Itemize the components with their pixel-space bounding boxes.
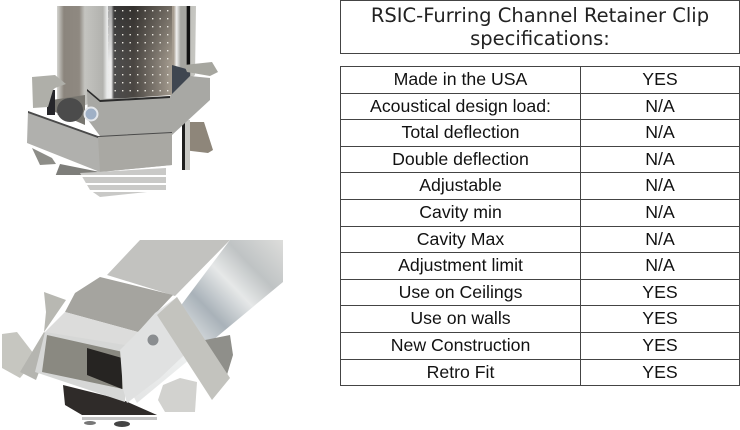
specifications table: N/A	[645, 202, 675, 222]
title	[340, 0, 740, 54]
isolator inside	[87, 348, 122, 389]
opening interior	[42, 335, 123, 389]
rear finger right	[205, 335, 233, 378]
opening frame	[45, 312, 138, 350]
rear right finger	[184, 62, 218, 76]
product photos	[2, 6, 283, 427]
specifications table: Use on Ceilings	[399, 282, 522, 302]
title: RSIC-Furring Channel Retainer Clip	[371, 4, 709, 27]
channel column	[57, 6, 196, 115]
front finger	[158, 378, 197, 412]
screw	[84, 108, 98, 120]
specifications table: N/A	[645, 255, 675, 275]
top photo: clip on vertical channel	[27, 6, 218, 197]
specifications table: YES	[642, 308, 678, 328]
specifications table: N/A	[645, 96, 675, 116]
specifications table: Adjustable	[419, 175, 502, 195]
fingers left	[44, 292, 66, 332]
channel face	[107, 240, 230, 296]
lower fragments	[32, 148, 56, 165]
specifications table: N/A	[645, 229, 675, 249]
specifications table: N/A	[645, 149, 675, 169]
specifications table: Total deflection	[402, 122, 520, 142]
specifications table: YES	[642, 335, 678, 355]
specifications table: Use on walls	[410, 308, 511, 328]
specifications table: N/A	[645, 175, 675, 195]
specifications table: YES	[642, 69, 678, 89]
upper band	[87, 89, 172, 136]
bottom photo: clip on horizontal channel	[2, 240, 283, 427]
specifications table: Retro Fit	[427, 362, 494, 382]
specifications table: YES	[642, 362, 678, 382]
specifications table: Adjustment limit	[398, 255, 523, 275]
specifications table: YES	[642, 282, 678, 302]
title: specifications:	[470, 27, 610, 50]
channel flange	[125, 240, 283, 403]
rubber block	[63, 385, 157, 415]
specifications table: Cavity Max	[417, 229, 504, 249]
lower band	[27, 111, 172, 172]
specifications table: New Construction	[391, 335, 530, 355]
diagonal strap	[157, 297, 230, 400]
clip top	[65, 277, 173, 332]
rear left finger	[32, 75, 66, 108]
specifications table	[340, 66, 740, 386]
specifications table: N/A	[645, 122, 675, 142]
specifications table: Double deflection	[392, 149, 529, 169]
side flange	[120, 297, 200, 403]
specifications table: Cavity min	[419, 202, 502, 222]
rear window under column	[52, 95, 85, 125]
specifications table: Acoustical design load:	[370, 96, 551, 116]
specifications table: Made in the USA	[394, 69, 527, 89]
screw	[146, 334, 160, 346]
